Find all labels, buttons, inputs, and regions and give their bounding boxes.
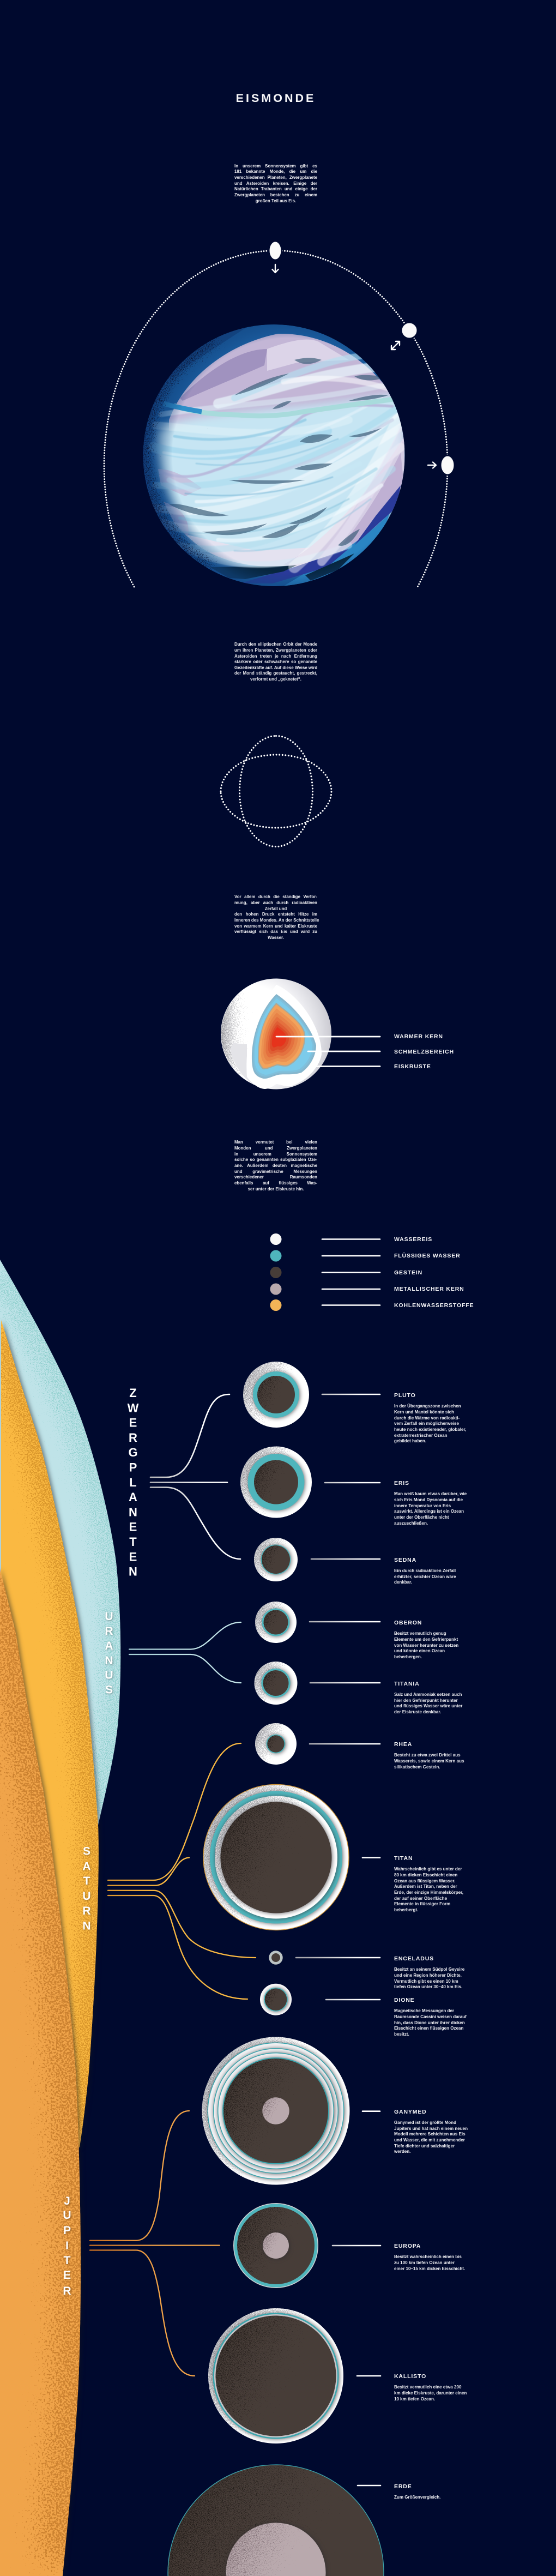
text: Dione: [394, 1997, 467, 2037]
text: Erde: [394, 2483, 440, 2500]
text: Ganymed: Jupiters und hat nach einem neuen: [394, 2126, 468, 2131]
legend label: hydrocarbons: KOHLENWASSERSTOFFE: [394, 1302, 474, 1309]
text: heat and melting: den hohen Druck entsteht Hitze im: [234, 912, 317, 917]
moon: Dione: [260, 1984, 292, 2015]
moon: Titania: [254, 1662, 298, 1705]
text: Eris: [394, 1480, 467, 1526]
text: Titania: hier den Gefrierpunkt herunter: [394, 1698, 458, 1703]
vertical label: Uranus: A: [105, 1640, 113, 1652]
deformation: two dotted tidal shapes: [221, 736, 331, 846]
vertical label: Zwergplaneten: R: [129, 1431, 137, 1445]
label: melting zone: SCHMELZBEREICH: [394, 1048, 454, 1055]
text: Titan: TITAN: [394, 1855, 413, 1862]
intro text: großen Teil aus Eis.: [256, 198, 296, 203]
text: Enceladus: tiefen Ozean unter 30–40 km Eis.: [394, 1984, 462, 1989]
text: Ganymed: Ganymed ist der größte Mond: [394, 2120, 456, 2125]
legend label: water ice: WASSEREIS: [394, 1236, 432, 1242]
text: Ganymed: [394, 2109, 468, 2154]
text: Oberon: und könnte einen Ozean: [394, 1648, 445, 1653]
moon: Pluto: [243, 1362, 309, 1428]
text: subglacial oceans: ebenfalls auf flüssiges Was-: [234, 1181, 317, 1185]
text: tidal forces: um ihren Planeten, Zwergplaneten oder: [234, 648, 317, 653]
vertical label: Uranus: S: [105, 1684, 113, 1696]
text: Sedna: erhitzter, seichter Ozean wäre: [394, 1574, 456, 1579]
text: Titan: 80 km dicken Eisschicht einen: [394, 1873, 457, 1877]
text: Sedna: Ein durch radioaktiven Zerfall: [394, 1568, 456, 1573]
vertical label: Zwergplaneten: E: [129, 1520, 137, 1534]
text: Rhea: [394, 1741, 464, 1770]
text: Titan: Elemente in flüssiger Form: [394, 1901, 450, 1906]
text: Dione: hin, dass Dione unter ihrer dicken: [394, 2020, 465, 2025]
text: Oberon: beherbergen.: [394, 1654, 422, 1659]
vertical label: Uranus: U: [105, 1669, 113, 1682]
text: Titania: TITANIA: [394, 1681, 420, 1687]
vertical label: Zwergplaneten: L: [129, 1476, 137, 1489]
text: Pluto: vem Zerfall ein möglicherweise: [394, 1421, 459, 1426]
text: Dione: Eisschicht einen flüssigen Ozean: [394, 2026, 463, 2031]
moon: upper right of orbit: [401, 322, 418, 339]
vertical label: Zwergplaneten: Z: [129, 1386, 137, 1400]
text: tidal forces: verformt und „geknetet“.: [250, 677, 301, 682]
text: tidal forces: [234, 642, 317, 682]
vertical label: Zwergplaneten: N: [129, 1565, 137, 1579]
vertical label: Saturn: S: [83, 1845, 90, 1857]
text: heat and melting: verflüssigt sich das Eis und wird zu: [234, 929, 317, 934]
text: Dione: Raumsonde Cassini weisen darauf: [394, 2014, 467, 2019]
vertical label: Jupiter: J: [64, 2195, 70, 2207]
text: Pluto: [394, 1392, 466, 1443]
text: Pluto: gebildet haben.: [394, 1439, 426, 1443]
text: Pluto: PLUTO: [394, 1392, 416, 1399]
text: subglacial oceans: in unserem Sonnensystem: [234, 1152, 317, 1157]
vertical label: Zwergplaneten: E: [129, 1550, 137, 1563]
vertical label: Jupiter: P: [63, 2224, 71, 2237]
text: Eris: auszuschließen.: [394, 1521, 428, 1526]
moon: Titan: [203, 1784, 349, 1930]
legend label: rock: GESTEIN: [394, 1269, 422, 1276]
text: Enceladus: Vermutlich gibt es einen 10 km: [394, 1979, 458, 1984]
text: tidal forces: Asteroiden treten je nach Entfernung: [234, 653, 317, 659]
connectors: Uranus moons: [129, 1622, 241, 1683]
intro text: In unserem Sonnensystem gibt es: [234, 164, 317, 168]
illustration layer: [0, 242, 454, 2576]
vertical label: Zwergplaneten: N: [129, 1505, 137, 1519]
text: Dione: besitzt.: [394, 2032, 409, 2037]
text: subglacial oceans: [234, 1140, 317, 1191]
text: tidal forces: Durch den elliptischen Orbit der Monde: [234, 642, 317, 647]
text: Europa: [394, 2243, 465, 2271]
text: subglacial oceans: Man vermutet bei vielen: [234, 1140, 317, 1145]
text: Enceladus: und eine Region höherer Dichte.: [394, 1973, 462, 1978]
vertical label: Saturn: N: [82, 1920, 91, 1933]
text: Kallisto: 10 km tiefen Ozean.: [394, 2397, 435, 2402]
arrow: diagonal double: [391, 341, 400, 350]
text: Sedna: SEDNA: [394, 1557, 416, 1563]
connectors: Jupiter moons: [90, 2111, 220, 2376]
text: Pluto: durch die Wärme von radioakti-: [394, 1416, 460, 1421]
text: Titan: Wahrscheinlich gibt es unter der: [394, 1867, 462, 1871]
text: Kallisto: [394, 2373, 467, 2402]
vertical label: Saturn: R: [82, 1905, 91, 1917]
moon: Ganymed: [202, 2037, 350, 2184]
vertical label: Zwergplaneten: G: [128, 1446, 138, 1459]
text: Titan: der auf seiner Oberfläche: [394, 1896, 447, 1901]
text: Pluto: extraterrestrischer Ozean: [394, 1433, 448, 1438]
text: Dione: DIONE: [394, 1997, 415, 2003]
text: heat and melting: Inneren des Mondes. An der Schnittstelle: [234, 918, 319, 923]
band: Saturn: [1, 1320, 99, 2147]
text: Europa: EUROPA: [394, 2243, 421, 2249]
callout lines: core, melting zone, crust: [276, 1037, 380, 1067]
text: subglacial oceans: ane. Außerdem deuten magnetische: [234, 1163, 317, 1168]
text: Sedna: [394, 1557, 456, 1585]
text: Titania: [394, 1681, 462, 1714]
text: Erde: Zum Größenvergleich.: [394, 2495, 440, 2500]
planet: icy moon surface: [143, 324, 406, 586]
text: Europa: zu 100 km tiefen Ozean unter: [394, 2260, 455, 2265]
text: Enceladus: Besitzt an seinem Südpol Geysire: [394, 1967, 464, 1972]
moon: Kallisto: [208, 2308, 343, 2443]
vertical label: Saturn: A: [82, 1861, 91, 1873]
planet: Earth for scale: [168, 2465, 384, 2576]
text: heat and melting: Wasser.: [268, 935, 284, 940]
vertical label: Saturn: U: [82, 1890, 91, 1903]
intro text: und Asteroiden kreisen. Einige der: [234, 181, 317, 186]
connectors: Saturn moons: [108, 1743, 256, 1999]
text: Rhea: silikatischem Gestein.: [394, 1765, 440, 1770]
legend lines: [322, 1239, 380, 1305]
text: subglacial oceans: und gravimetrische Messungen: [234, 1169, 317, 1174]
text: Titan: beherbergt.: [394, 1907, 418, 1912]
vertical label: Uranus: N: [105, 1654, 113, 1667]
text: Erde: ERDE: [394, 2483, 412, 2490]
text: Ganymed: Modell mehrere Schichten aus Eis: [394, 2132, 466, 2136]
text: Titania: Salz und Ammoniak setzen auch: [394, 1692, 462, 1697]
cutaway moon: warm core, melting zone, ice crust: [221, 978, 331, 1090]
text: Titania: und flüssiges Wasser wäre unter: [394, 1704, 462, 1708]
vertical label: Uranus: R: [105, 1625, 113, 1638]
arrow: right: [428, 462, 436, 468]
text: Eris: auswirkt. Allerdings ist ein Ozean: [394, 1509, 464, 1514]
connectors: dwarf planets: [150, 1394, 240, 1559]
legend: material swatches: [270, 1233, 281, 1311]
vertical label: Jupiter: U: [63, 2209, 71, 2222]
vertical label: Zwergplaneten: W: [128, 1401, 139, 1415]
text: Oberon: OBERON: [394, 1620, 422, 1626]
text: subglacial oceans: solche so genannten subglazialen Oze-: [234, 1157, 317, 1162]
text: Ganymed: und Wasser, die mit zunehmender: [394, 2138, 465, 2142]
text: Oberon: Elemente um den Gefrierpunkt: [394, 1637, 458, 1642]
text: Ganymed: GANYMED: [394, 2109, 427, 2115]
label: warm core: WARMER KERN: [394, 1033, 443, 1040]
text: Kallisto: Besitzt vermutlich eine etwa 200: [394, 2385, 461, 2390]
moon: Europa: [233, 2203, 318, 2288]
text: Dione: Magnetische Messungen der: [394, 2008, 454, 2013]
moon: top of orbit, stretched: [269, 241, 282, 260]
text: tidal forces: stärkere oder schwächere so genannte: [234, 659, 317, 664]
intro text: verschiedenen Planeten, Zwergplanete: [234, 175, 317, 180]
text: subglacial oceans: Monden und Zwergplaneten: [234, 1146, 317, 1151]
moon: Oberon: [255, 1602, 297, 1643]
moon: Eris: [240, 1446, 312, 1518]
vertical label: Zwergplaneten: E: [129, 1416, 137, 1430]
text: Eris: Man weiß kaum etwas darüber, wie: [394, 1491, 467, 1496]
label: ice crust: EISKRUSTE: [394, 1063, 431, 1070]
text: Kallisto: km dicke Eiskruste, darunter einen: [394, 2391, 467, 2396]
moon: Sedna: [254, 1538, 298, 1581]
text: Titan: [394, 1855, 463, 1912]
text: heat and melting: von warmem Kern und kalter Eiskruste: [234, 924, 317, 929]
text: Europa: Besitzt wahrscheinlich einen bis: [394, 2254, 462, 2259]
text: Pluto: Kern und Mantel könnte sich: [394, 1410, 454, 1415]
text: Titan: Ozean aus flüssigem Wasser.: [394, 1879, 455, 1883]
intro text: Zwergplaneten bestehen zu einem: [234, 192, 317, 197]
intro text: Natürlichen Trabanten und einige der: [234, 186, 317, 191]
text: Pluto: In der Übergangszone zwischen: [394, 1404, 461, 1409]
vertical label: Jupiter: E: [63, 2269, 71, 2282]
text: Eris: innere Temperatur von Eris: [394, 1503, 451, 1508]
vertical label: Zwergplaneten: T: [129, 1535, 137, 1549]
text: Eris: ERIS: [394, 1480, 409, 1486]
legend label: liquid water: FLÜSSIGES WASSER: [394, 1253, 461, 1259]
vertical label: Uranus: U: [105, 1610, 113, 1623]
band: Uranus: [0, 1260, 120, 1825]
text: Oberon: Besitzt vermutlich genug: [394, 1631, 446, 1636]
text: tidal forces: Gezeitenkräfte auf. Auf diese Weise wird: [234, 665, 317, 670]
text: Sedna: denkbar.: [394, 1580, 412, 1585]
arrow: down: [273, 264, 278, 273]
text: Rhea: Wassereis, sowie einem Kern aus: [394, 1759, 464, 1764]
vertical label: Jupiter: R: [63, 2285, 71, 2297]
moon: Rhea: [255, 1723, 297, 1765]
text: Pluto: heute noch existierender, globaler,: [394, 1427, 466, 1432]
vertical label: Zwergplaneten: A: [129, 1490, 137, 1504]
text: Ganymed: Tiefe dichter und salzhaltiger: [394, 2144, 455, 2148]
moon: Enceladus: [269, 1951, 283, 1965]
text: Eris: sich Eris Mond Dysnomia auf die: [394, 1497, 463, 1502]
vertical label: Zwergplaneten: P: [129, 1460, 137, 1474]
intro text: 181 bekannte Monde, die um die: [234, 169, 317, 174]
text: heat and melting: [234, 894, 319, 940]
text: heat and melting: Zerfall und: [265, 906, 287, 911]
orbit: dotted ellipse: [104, 251, 448, 587]
text: Titan: Erde, der einzige Himmelskörper,: [394, 1890, 463, 1895]
text: Titan: Außerdem ist Titan, neben der: [394, 1884, 457, 1889]
text: Europa: einer 10–15 km dicken Eisschicht.: [394, 2266, 465, 2271]
text: Rhea: Besteht zu etwa zwei Drittel aus: [394, 1753, 461, 1758]
moon: right of orbit, stretched: [440, 455, 455, 475]
vertical label: Jupiter: I: [65, 2240, 69, 2252]
text: Titania: der Eiskruste denkbar.: [394, 1710, 441, 1714]
text: Enceladus: ENCELADUS: [394, 1955, 434, 1962]
band: Jupiter: [0, 1568, 81, 2576]
text: subglacial oceans: verschiedener Raumsonden: [234, 1175, 317, 1179]
text: Oberon: von Wasser herunter zu setzen: [394, 1643, 458, 1648]
text: Ganymed: werden.: [394, 2149, 410, 2154]
title: EISMONDE: [236, 92, 316, 105]
text: tidal forces: der Mond ständig gestaucht, gestreckt,: [234, 671, 317, 676]
text: Rhea: RHEA: [394, 1741, 412, 1748]
text: Eris: unter der Oberfläche nicht: [394, 1515, 449, 1520]
text: subglacial oceans: ser unter der Eiskruste hin.: [248, 1187, 304, 1191]
moon leader lines: [296, 1394, 380, 2485]
legend label: metallic core: METALLISCHER KERN: [394, 1286, 464, 1292]
text: Enceladus: [394, 1955, 464, 1989]
text: heat and melting: mung, aber auch durch radioaktiven: [234, 900, 317, 905]
intro text: [234, 164, 317, 203]
vertical label: Saturn: T: [83, 1875, 90, 1887]
vertical label: Jupiter: T: [64, 2254, 71, 2267]
text: heat and melting: Vor allem durch die ständige Verfor-: [234, 894, 317, 899]
text: Kallisto: KALLISTO: [394, 2373, 426, 2380]
text: Oberon: [394, 1620, 458, 1659]
